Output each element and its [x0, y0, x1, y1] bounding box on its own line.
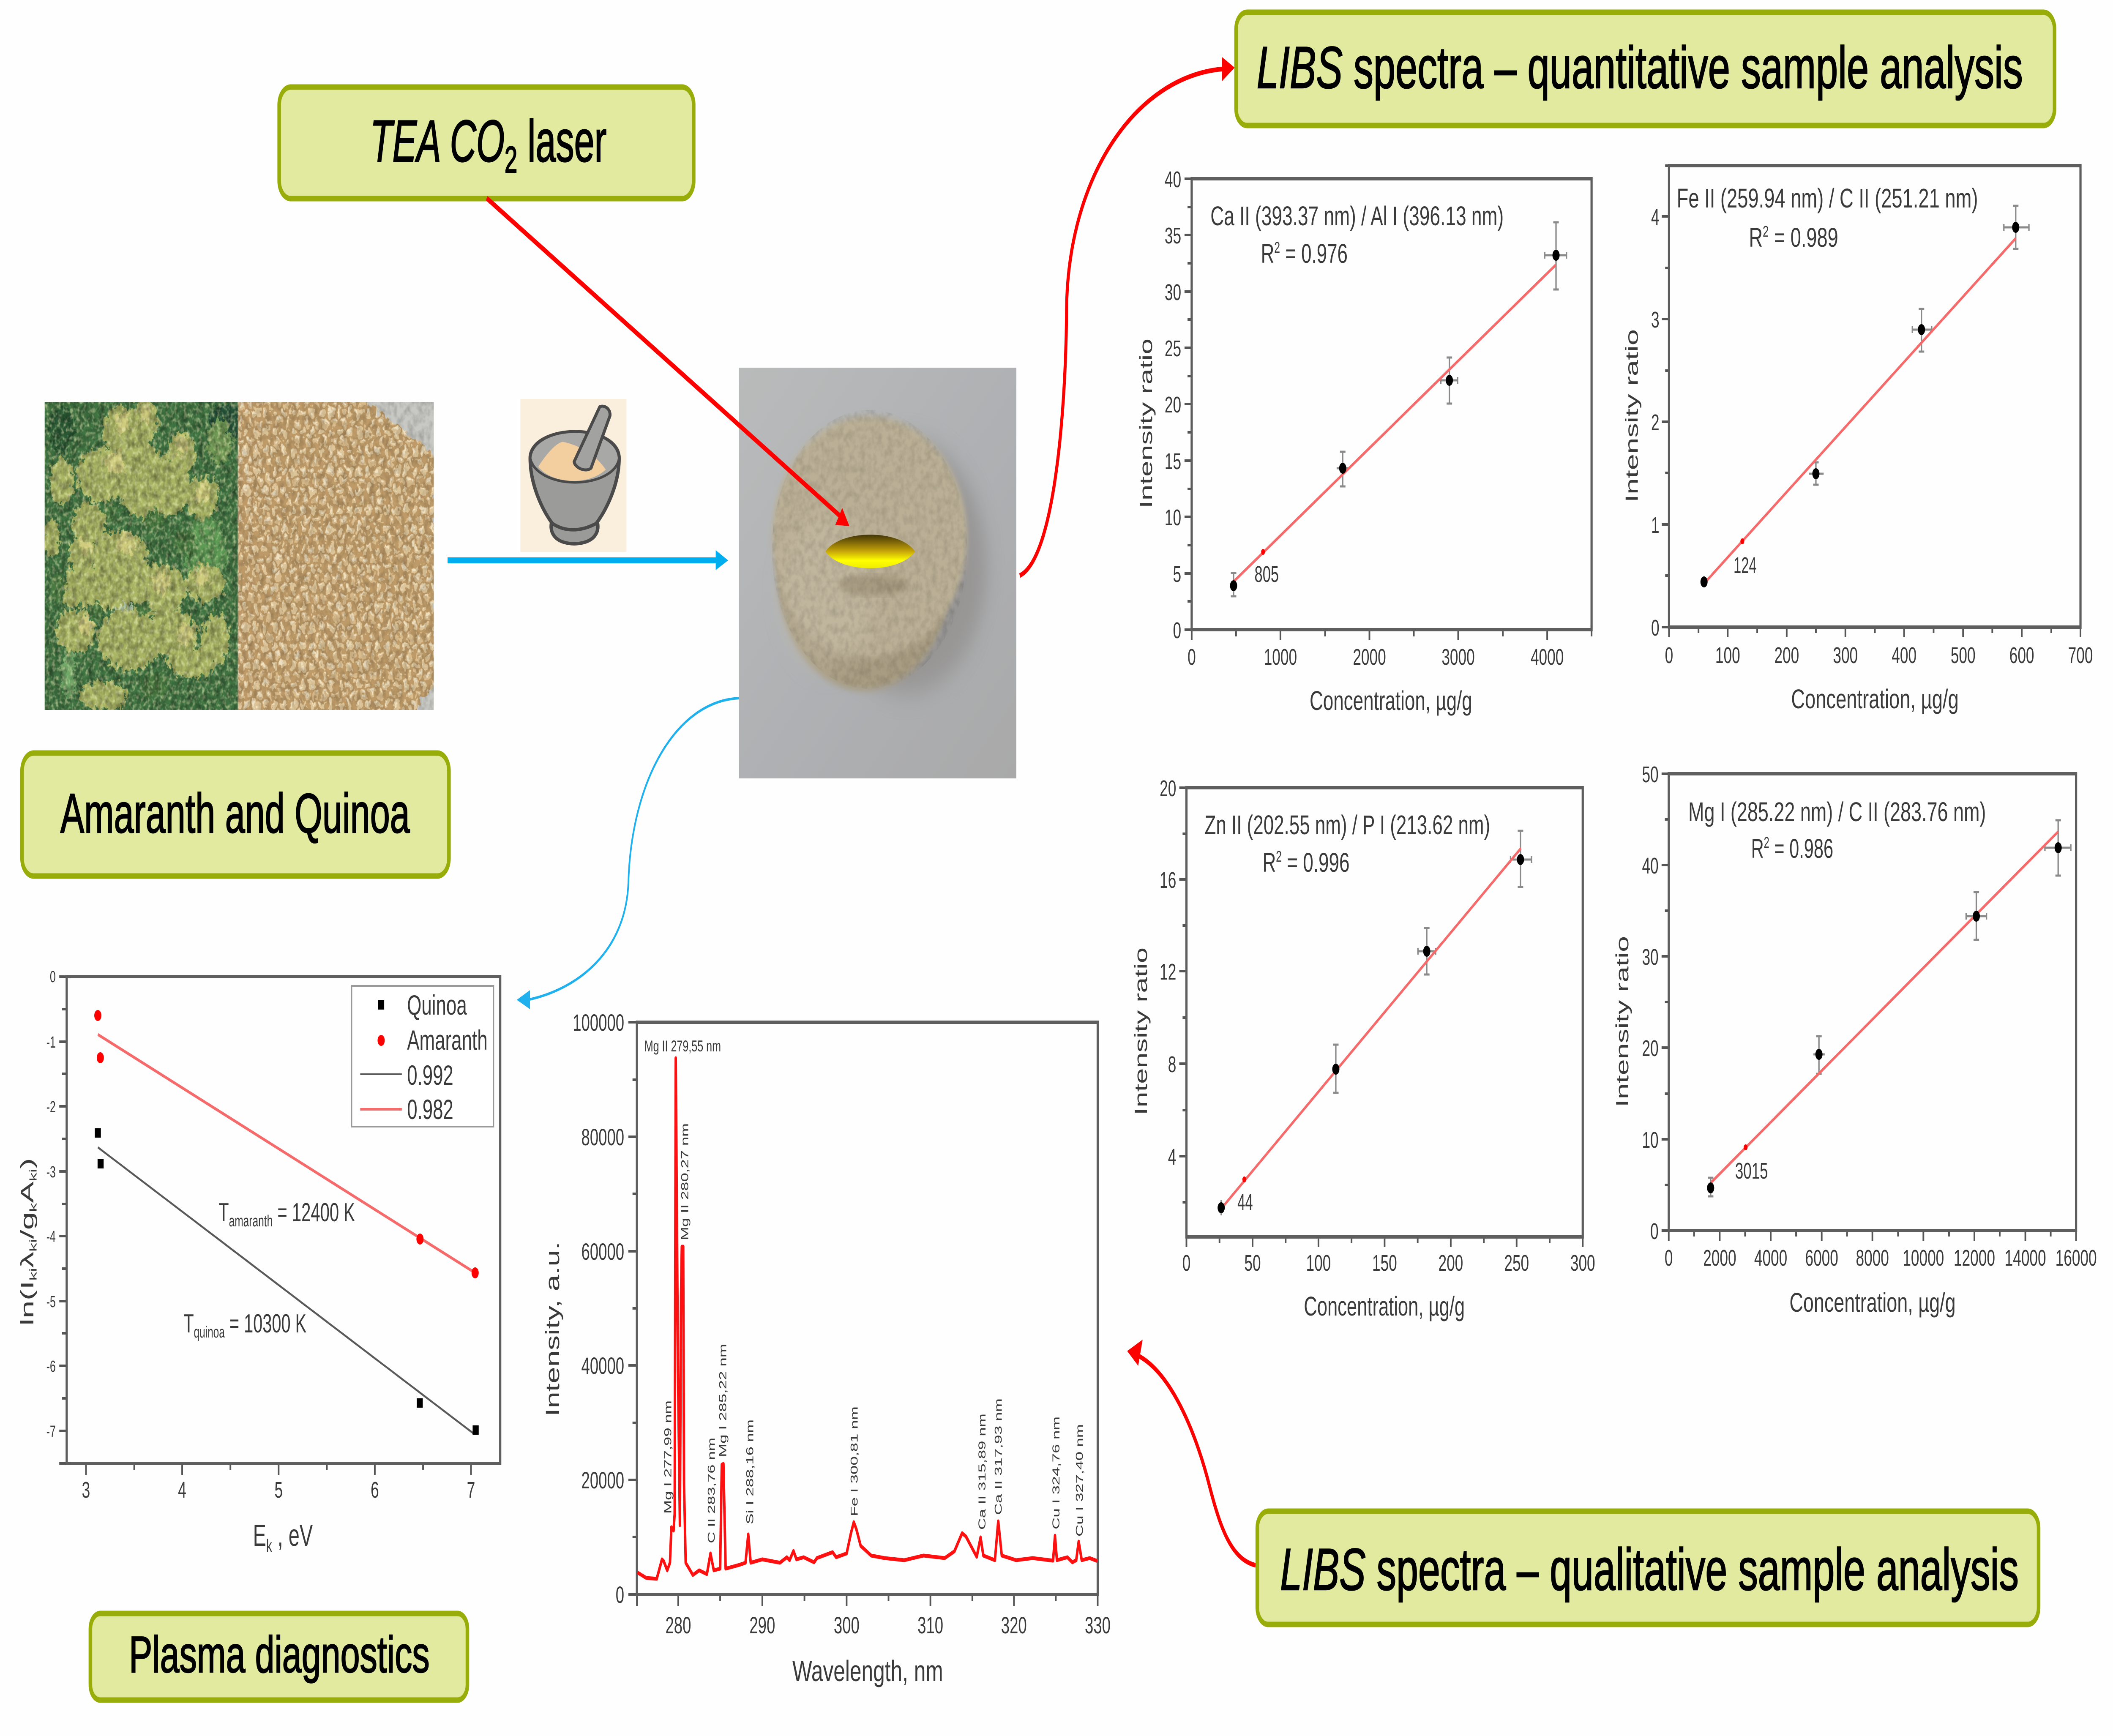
chart: Boltzmann plot plasma diagnostics: λ — [17, 1252, 37, 1268]
arrow: to spectrum (red curve) — [1127, 1340, 1256, 1565]
x ticks: 2000 — [1703, 1245, 1736, 1271]
y ticks: 30 — [1642, 944, 1659, 970]
y ticks: 20 — [1160, 775, 1176, 801]
fit line — [1233, 265, 1556, 582]
error bars — [1708, 820, 2071, 1196]
axis titles: Concentration, µg/g — [1789, 1288, 1956, 1318]
y ticks — [1165, 167, 1181, 643]
chart: Mg I / C II calibration: = 0.986 — [1769, 834, 1833, 864]
fit line — [1711, 832, 2058, 1182]
quinoa points — [95, 1128, 479, 1435]
y tick labels: 40000 — [581, 1353, 624, 1379]
chart: Boltzmann plot plasma diagnostics — [17, 968, 500, 1556]
x ticks — [1182, 1250, 1595, 1276]
peak labels: Cu I 327,40 nm — [1074, 1424, 1085, 1537]
label: LIBS quantitative — [1236, 12, 2055, 126]
y ticks — [1160, 775, 1176, 1170]
chart: Zn II / P I calibration: = 0.996 — [1282, 848, 1350, 878]
x tick labels: 330 — [1085, 1612, 1111, 1639]
x ticks: 8000 — [1856, 1245, 1889, 1271]
x ticks: 700 — [2068, 642, 2093, 668]
y ticks — [1642, 762, 1659, 1244]
x ticks — [1665, 1245, 2097, 1271]
x ticks — [1665, 642, 2093, 668]
x ticks: 300 — [1570, 1250, 1595, 1276]
peak labels: Mg I 285,22 nm — [717, 1344, 729, 1457]
x tick labels: 290 — [749, 1612, 775, 1639]
label: LIBS quantitative: LIBS spectra – quantitative sample analysis — [1257, 35, 2023, 101]
y tick labels: -2 — [46, 1098, 56, 1116]
x ticks: 4000 — [1531, 644, 1564, 670]
chart: Ca II / Al I calibration: Intensity ratio — [1136, 338, 1156, 508]
x tick labels: 280 — [665, 1612, 691, 1639]
x ticks: 0 — [1665, 1245, 1673, 1271]
y tick labels: 80000 — [581, 1124, 624, 1151]
y ticks: 0 — [1650, 1218, 1659, 1244]
arrow: to plasma diagnostics (blue curve) — [517, 698, 739, 1009]
chart: Boltzmann plot plasma diagnostics: A — [17, 1181, 37, 1203]
y ticks: 16 — [1160, 867, 1176, 893]
x ticks: 200 — [1774, 642, 1799, 668]
chart: Fe II / C II calibration: 2 — [1763, 223, 1769, 240]
x ticks: 600 — [2009, 642, 2034, 668]
x tick labels: 3 — [82, 1477, 90, 1503]
label: Amaranth and Quinoa: Amaranth and Quinoa — [60, 782, 410, 844]
x tick labels: 300 — [834, 1612, 860, 1639]
amaranth points — [94, 1010, 479, 1278]
chart: Boltzmann plot plasma diagnostics: = 10300 K — [225, 1310, 306, 1338]
x ticks: 1000 — [1264, 644, 1297, 670]
axis titles: Concentration, µg/g — [1791, 684, 1959, 714]
temperature annotations: T — [218, 1198, 229, 1227]
x ticks: 100 — [1715, 642, 1740, 668]
chart: Mg I / C II calibration — [1613, 762, 2097, 1318]
line ratio and R2: Fe II (259.94 nm) / C II (251.21 nm) — [1677, 183, 1978, 213]
y ticks: 50 — [1642, 762, 1659, 787]
line ratio and R2: Mg I (285.22 nm) / C II (283.76 nm) — [1688, 797, 1986, 827]
label: TEA CO2 laser: laser — [517, 108, 606, 175]
laser spot — [825, 535, 915, 568]
y ticks: 35 — [1165, 223, 1181, 248]
label: TEA CO2 laser: TEA CO — [370, 108, 505, 175]
chart: Ca II / Al I calibration: R — [1261, 239, 1274, 269]
label: Plasma diagnostics: Plasma diagnostics — [129, 1626, 430, 1683]
y tick labels: 60000 — [581, 1239, 624, 1265]
chart: Fe II / C II calibration: Intensity ratio — [1622, 329, 1642, 502]
chart: Fe II / C II calibration: R — [1749, 223, 1762, 253]
x ticks: 100 — [1306, 1250, 1331, 1276]
x tick labels: 320 — [1001, 1612, 1027, 1639]
x ticks: 300 — [1833, 642, 1858, 668]
axis titles: , eV — [272, 1518, 313, 1552]
chart: Boltzmann plot plasma diagnostics: ki — [28, 1268, 39, 1280]
chart: Boltzmann plot plasma diagnostics: k — [28, 1203, 39, 1212]
y tick labels — [46, 968, 56, 1440]
chart: Zn II / P I calibration: 2 — [1276, 848, 1282, 865]
data points — [1230, 250, 1559, 591]
data points — [1701, 222, 2019, 587]
peak labels: Fe I 300,81 nm — [849, 1406, 860, 1516]
chart: Mg I / C II calibration: R — [1751, 834, 1764, 864]
chart: Fe II / C II calibration — [1622, 166, 2093, 714]
peak labels — [644, 1037, 1085, 1543]
sample point — [1242, 1176, 1246, 1182]
y ticks: 8 — [1168, 1051, 1176, 1077]
axis titles: Concentration, µg/g — [1304, 1291, 1465, 1321]
y ticks: 30 — [1165, 279, 1181, 305]
y tick labels: -4 — [46, 1228, 56, 1245]
y ticks: 1 — [1651, 512, 1660, 538]
x ticks: 400 — [1892, 642, 1916, 668]
temperature annotations: amaranth — [229, 1212, 273, 1230]
arrow: to quantitative analysis (red curve) — [1020, 57, 1235, 576]
axis titles: k — [266, 1536, 272, 1556]
x ticks: 50 — [1244, 1250, 1261, 1276]
y tick labels: 0 — [50, 968, 56, 985]
photo: quinoa seeds — [234, 397, 435, 714]
y tick labels: -6 — [46, 1357, 56, 1375]
x tick labels: 4 — [178, 1477, 186, 1503]
legend: Quinoa — [407, 990, 467, 1021]
chart: Ca II / Al I calibration: = 0.976 — [1280, 239, 1348, 269]
label: TEA CO2 laser — [279, 87, 693, 199]
label: Amaranth and Quinoa — [22, 753, 449, 876]
y tick labels: 0 — [616, 1582, 624, 1608]
x ticks — [1188, 644, 1564, 670]
y tick labels: -5 — [46, 1293, 56, 1310]
error bars — [1704, 206, 2029, 587]
line ratio and R2: Ca II (393.37 nm) / Al I (396.13 nm) — [1210, 201, 1504, 231]
fit lines — [98, 1035, 475, 1273]
x ticks: 14000 — [2005, 1245, 2046, 1271]
sample point — [1744, 1144, 1747, 1150]
data points — [1707, 842, 2062, 1193]
y ticks: 4 — [1168, 1144, 1176, 1170]
chart: Mg I / C II calibration: 2 — [1764, 834, 1769, 851]
y ticks: 10 — [1165, 505, 1181, 530]
error bars — [1221, 831, 1532, 1215]
x ticks: 0 — [1665, 642, 1673, 668]
chart: LIBS spectrum: Intensity, a.u. — [542, 1242, 563, 1417]
x ticks: 0 — [1182, 1250, 1190, 1276]
y ticks: 5 — [1173, 561, 1181, 587]
y tick labels: -7 — [46, 1422, 56, 1440]
chart: Boltzmann plot plasma diagnostics: T — [183, 1310, 194, 1338]
line ratio and R2: Zn II (202.55 nm) / P I (213.62 nm) — [1205, 810, 1490, 840]
chart: Mg I / C II calibration: 3015 — [1735, 1158, 1768, 1184]
legend — [352, 986, 494, 1127]
label: LIBS qualitative: LIBS spectra – qualitative sample analysis — [1280, 1537, 2019, 1603]
chart: Boltzmann plot plasma diagnostics: ki — [28, 1239, 39, 1252]
legend: Amaranth — [407, 1025, 488, 1056]
data points — [1218, 854, 1524, 1213]
y ticks: 12 — [1160, 959, 1176, 985]
label: TEA CO2 laser: 2 — [505, 139, 517, 180]
chart: Ca II / Al I calibration: 805 — [1255, 561, 1279, 587]
y tick labels: 20000 — [581, 1467, 624, 1494]
chart: Zn II / P I calibration: R — [1262, 848, 1275, 878]
sample point — [1261, 549, 1265, 555]
x tick labels — [82, 1477, 475, 1503]
x tick labels: 5 — [275, 1477, 283, 1503]
chart: Mg I / C II calibration: Intensity ratio — [1613, 936, 1632, 1107]
peak labels: Si I 288,16 nm — [744, 1419, 756, 1524]
chart: Boltzmann plot plasma diagnostics: ln(I — [17, 1287, 37, 1326]
x ticks: 250 — [1504, 1250, 1529, 1276]
x tick labels: 6 — [371, 1477, 379, 1503]
legend: 0.992 — [407, 1060, 453, 1091]
peak labels: Ca II 315,89 nm — [976, 1414, 988, 1530]
fit line — [1223, 848, 1521, 1206]
temperature annotations: = 12400 K — [273, 1198, 355, 1227]
chart: LIBS spectrum — [542, 1010, 1111, 1687]
x ticks: 4000 — [1754, 1245, 1787, 1271]
chart: Boltzmann plot plasma diagnostics: ki — [28, 1169, 39, 1182]
photo: amaranth plants — [43, 400, 243, 712]
peak labels: C II 283,76 nm — [706, 1438, 717, 1543]
y ticks: 20 — [1642, 1035, 1659, 1061]
peak labels: Mg I 277,99 nm — [662, 1400, 674, 1514]
y ticks — [1651, 204, 1660, 641]
peak labels: Mg II 279,55 nm — [644, 1037, 721, 1055]
y tick labels — [573, 1010, 624, 1608]
chart: Zn II / P I calibration — [1131, 775, 1595, 1321]
x ticks: 10000 — [1903, 1245, 1944, 1271]
y tick labels: -3 — [46, 1163, 56, 1181]
icon: mortar and pestle — [520, 399, 626, 552]
peak labels: Cu I 324,76 nm — [1050, 1417, 1062, 1529]
y ticks: 20 — [1165, 392, 1181, 418]
x ticks: 150 — [1372, 1250, 1397, 1276]
chart: Ca II / Al I calibration — [1136, 167, 1592, 716]
y ticks: 15 — [1165, 448, 1181, 474]
axis titles: Wavelength, nm — [792, 1654, 943, 1687]
y tick labels: 100000 — [573, 1010, 624, 1036]
chart: Boltzmann plot plasma diagnostics: ) — [17, 1158, 37, 1169]
y ticks: 2 — [1651, 409, 1660, 435]
chart: Ca II / Al I calibration: 2 — [1274, 239, 1280, 256]
chart: Fe II / C II calibration: = 0.989 — [1769, 223, 1838, 253]
chart: Boltzmann plot plasma diagnostics: quinoa — [194, 1323, 225, 1341]
peak labels: Ca II 317,93 nm — [993, 1398, 1004, 1515]
error bars — [1231, 222, 1567, 596]
y ticks: 40 — [1642, 853, 1659, 879]
chart: Zn II / P I calibration: 44 — [1237, 1189, 1253, 1215]
y ticks: 4 — [1651, 204, 1660, 230]
y ticks: 3 — [1651, 307, 1660, 333]
y ticks: 0 — [1651, 615, 1660, 641]
x ticks: 6000 — [1805, 1245, 1838, 1271]
y ticks: 10 — [1642, 1127, 1659, 1153]
photo: pressed sample pellet with laser spot — [739, 368, 1016, 778]
x ticks: 2000 — [1353, 644, 1386, 670]
y ticks: 40 — [1165, 167, 1181, 192]
x ticks: 0 — [1188, 644, 1196, 670]
arrow: sample preparation (blue) — [448, 550, 728, 570]
chart: Fe II / C II calibration: 124 — [1734, 552, 1757, 578]
label: Plasma diagnostics — [90, 1613, 467, 1700]
axis titles: Concentration, µg/g — [1310, 686, 1472, 716]
y ticks: 25 — [1165, 336, 1181, 361]
legend: 0.982 — [407, 1094, 453, 1125]
x tick labels: 7 — [467, 1477, 475, 1503]
x ticks: 200 — [1439, 1250, 1463, 1276]
x ticks: 16000 — [2056, 1245, 2097, 1271]
y ticks: 0 — [1173, 617, 1181, 643]
chart: Boltzmann plot plasma diagnostics: /g — [17, 1212, 37, 1239]
axis titles: E — [253, 1518, 266, 1552]
fit line — [1704, 238, 2016, 584]
spectrum trace — [637, 1058, 1097, 1579]
x ticks: 500 — [1951, 642, 1976, 668]
label: LIBS qualitative — [1257, 1511, 2039, 1624]
y tick labels: -1 — [46, 1033, 56, 1051]
x tick labels: 310 — [917, 1612, 943, 1639]
peak labels: Mg II 280,27 nm — [679, 1123, 691, 1240]
chart: Zn II / P I calibration: Intensity ratio — [1131, 947, 1151, 1115]
x ticks: 12000 — [1954, 1245, 1995, 1271]
x ticks: 3000 — [1441, 644, 1475, 670]
arrow: laser beam (red) — [487, 198, 849, 526]
sample point — [1740, 538, 1744, 544]
x tick labels — [665, 1612, 1111, 1639]
